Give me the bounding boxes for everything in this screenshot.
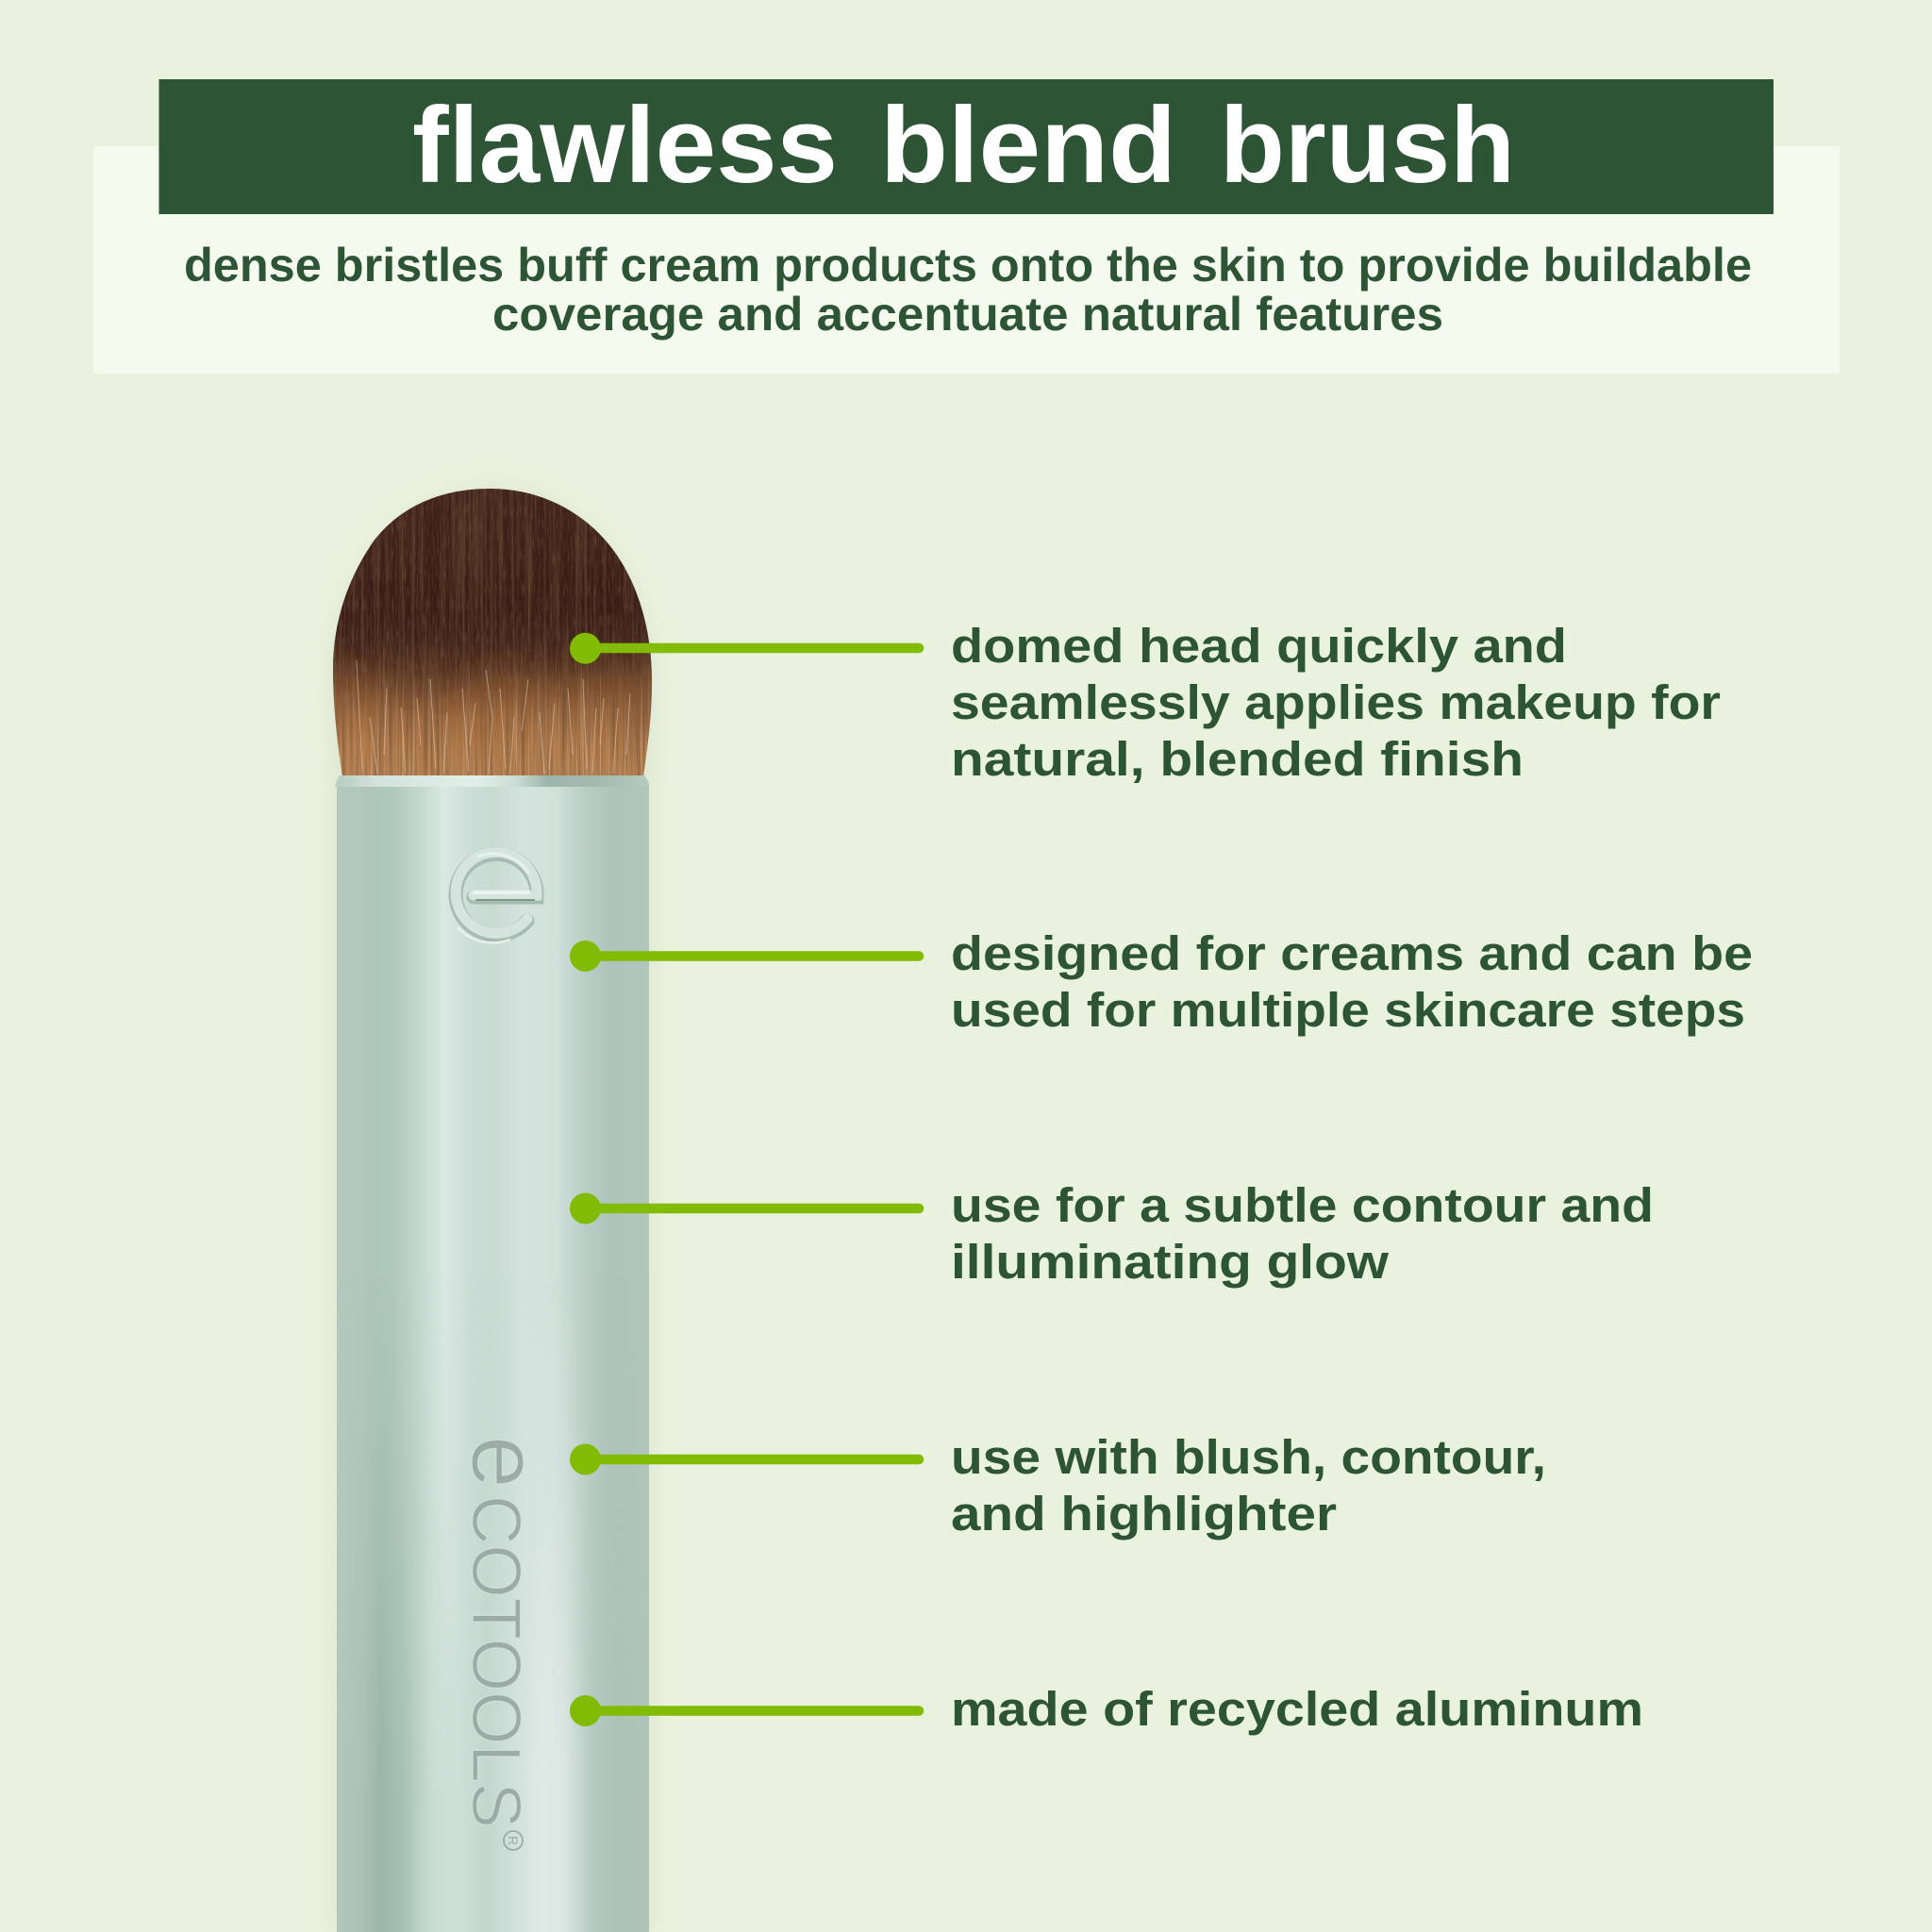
callout text: domed head quickly and <box>951 619 1567 673</box>
subtitle text: coverage and accentuate natural features <box>492 288 1443 341</box>
subtitle text: dense bristles buff cream products onto the skin to provide buildable <box>184 239 1752 291</box>
callout text <box>951 1430 1546 1541</box>
leader line <box>570 1192 919 1224</box>
title: blend <box>880 86 1176 206</box>
callout text: illuminating glow <box>951 1235 1389 1289</box>
callout 2: creams and skincare <box>570 926 1753 1037</box>
metal handle <box>335 775 649 1932</box>
registered mark <box>504 1831 523 1850</box>
callout text: designed for creams and can be <box>951 926 1753 980</box>
callout text: natural, blended finish <box>951 732 1524 786</box>
callout text <box>951 619 1721 786</box>
brand wordmark on handle: e <box>452 1436 558 1489</box>
title: flawless <box>412 86 838 206</box>
callout text: seamlessly applies makeup for <box>951 675 1721 729</box>
leader line <box>570 941 919 972</box>
brush illustration <box>325 481 660 1932</box>
leader line <box>570 1443 919 1475</box>
brand wordmark on handle: COTOOLS <box>458 1495 534 1828</box>
title: brush <box>1220 86 1515 206</box>
title banner <box>158 79 1774 214</box>
callout 1: domed head <box>570 619 1721 786</box>
callout text: use for a subtle contour and <box>951 1178 1654 1232</box>
callout text <box>951 1178 1654 1289</box>
registered mark: R <box>506 1836 521 1845</box>
icon: embossed e logo <box>456 852 537 942</box>
callout text: use with blush, contour, <box>951 1430 1546 1484</box>
subtitle text <box>184 239 1752 341</box>
callout 3: contour and glow <box>570 1178 1654 1289</box>
leader line <box>570 1695 919 1726</box>
pale subtitle panel <box>93 146 1840 374</box>
callout text: and highlighter <box>951 1487 1337 1541</box>
callout text: used for multiple skincare steps <box>951 983 1745 1037</box>
callout text: made of recycled aluminum <box>951 1682 1643 1736</box>
callout 5: recycled aluminum <box>570 1682 1643 1736</box>
soft shadow around brush <box>329 485 656 1932</box>
brand wordmark on handle <box>452 1436 558 1850</box>
panel: header <box>93 79 1840 374</box>
ferrule rim <box>335 775 649 787</box>
leader line <box>570 633 919 664</box>
callout 4: blush, contour, highlighter <box>570 1430 1546 1541</box>
callout text <box>951 926 1753 1037</box>
bristles <box>325 481 660 783</box>
